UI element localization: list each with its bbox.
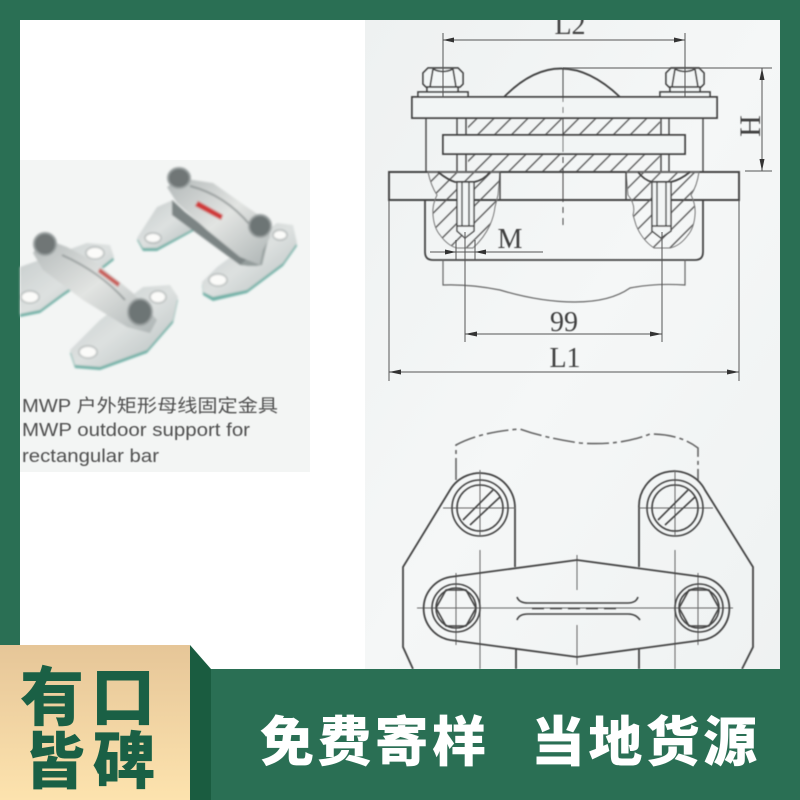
panel: product photo: [20, 160, 310, 472]
dimension lines: [389, 33, 772, 381]
badge text: 碑: [93, 728, 155, 797]
top green border: [0, 0, 800, 20]
left nut: [418, 68, 468, 97]
left weld section: [428, 172, 500, 248]
photo caption: [22, 396, 278, 466]
base plate outline: [403, 471, 753, 669]
center slot: [517, 597, 640, 620]
hatched bus bars: [468, 118, 660, 172]
badge text: [20, 662, 155, 797]
dimension labels: M: [498, 224, 523, 255]
green banner: [211, 669, 800, 800]
dimension arrows: [389, 38, 764, 374]
panel: technical drawings background: [365, 20, 780, 670]
lower body: [425, 200, 703, 260]
badge text: 口: [91, 662, 155, 734]
dimension labels: 99: [550, 307, 578, 338]
photo caption: rectangular bar: [22, 446, 159, 466]
photo: left bracket: [20, 233, 178, 370]
center line: [562, 68, 564, 225]
center lines: [443, 470, 713, 669]
top right screw: [647, 480, 703, 536]
banner text: 免费寄样: [260, 713, 486, 773]
right bolt: [675, 584, 723, 632]
photo: right bracket: [137, 168, 297, 301]
left bolt: [432, 584, 480, 632]
base plate: [389, 172, 739, 200]
dimension labels: H: [734, 115, 767, 137]
top dome: [504, 68, 620, 97]
dimension labels: L1: [549, 343, 581, 374]
drawing: plan view: [403, 429, 753, 669]
photo caption: MWP 户外矩形母线固定金具: [22, 396, 278, 416]
badge text: 皆: [24, 728, 85, 796]
right weld section: [626, 172, 699, 248]
side walls and bolts: [426, 118, 703, 172]
dash-dot broken outline: [456, 429, 698, 480]
badge: [0, 645, 190, 800]
badge side fold: [190, 645, 211, 800]
top left screw: [452, 480, 508, 536]
middle bar: [443, 135, 685, 154]
link plate: [424, 560, 729, 657]
dimension labels: L2: [554, 10, 586, 41]
banner text: [260, 713, 757, 773]
photo caption: MWP outdoor support for: [22, 420, 250, 440]
lower broken outline: [443, 260, 685, 302]
drawing: front section view: [389, 68, 739, 302]
right nut: [660, 68, 710, 97]
banner text: 当地货源: [531, 713, 757, 773]
badge text: 有: [20, 662, 84, 734]
top clamp plate: [412, 97, 717, 118]
dimension labels: [498, 10, 767, 374]
white content panel: [20, 20, 780, 670]
